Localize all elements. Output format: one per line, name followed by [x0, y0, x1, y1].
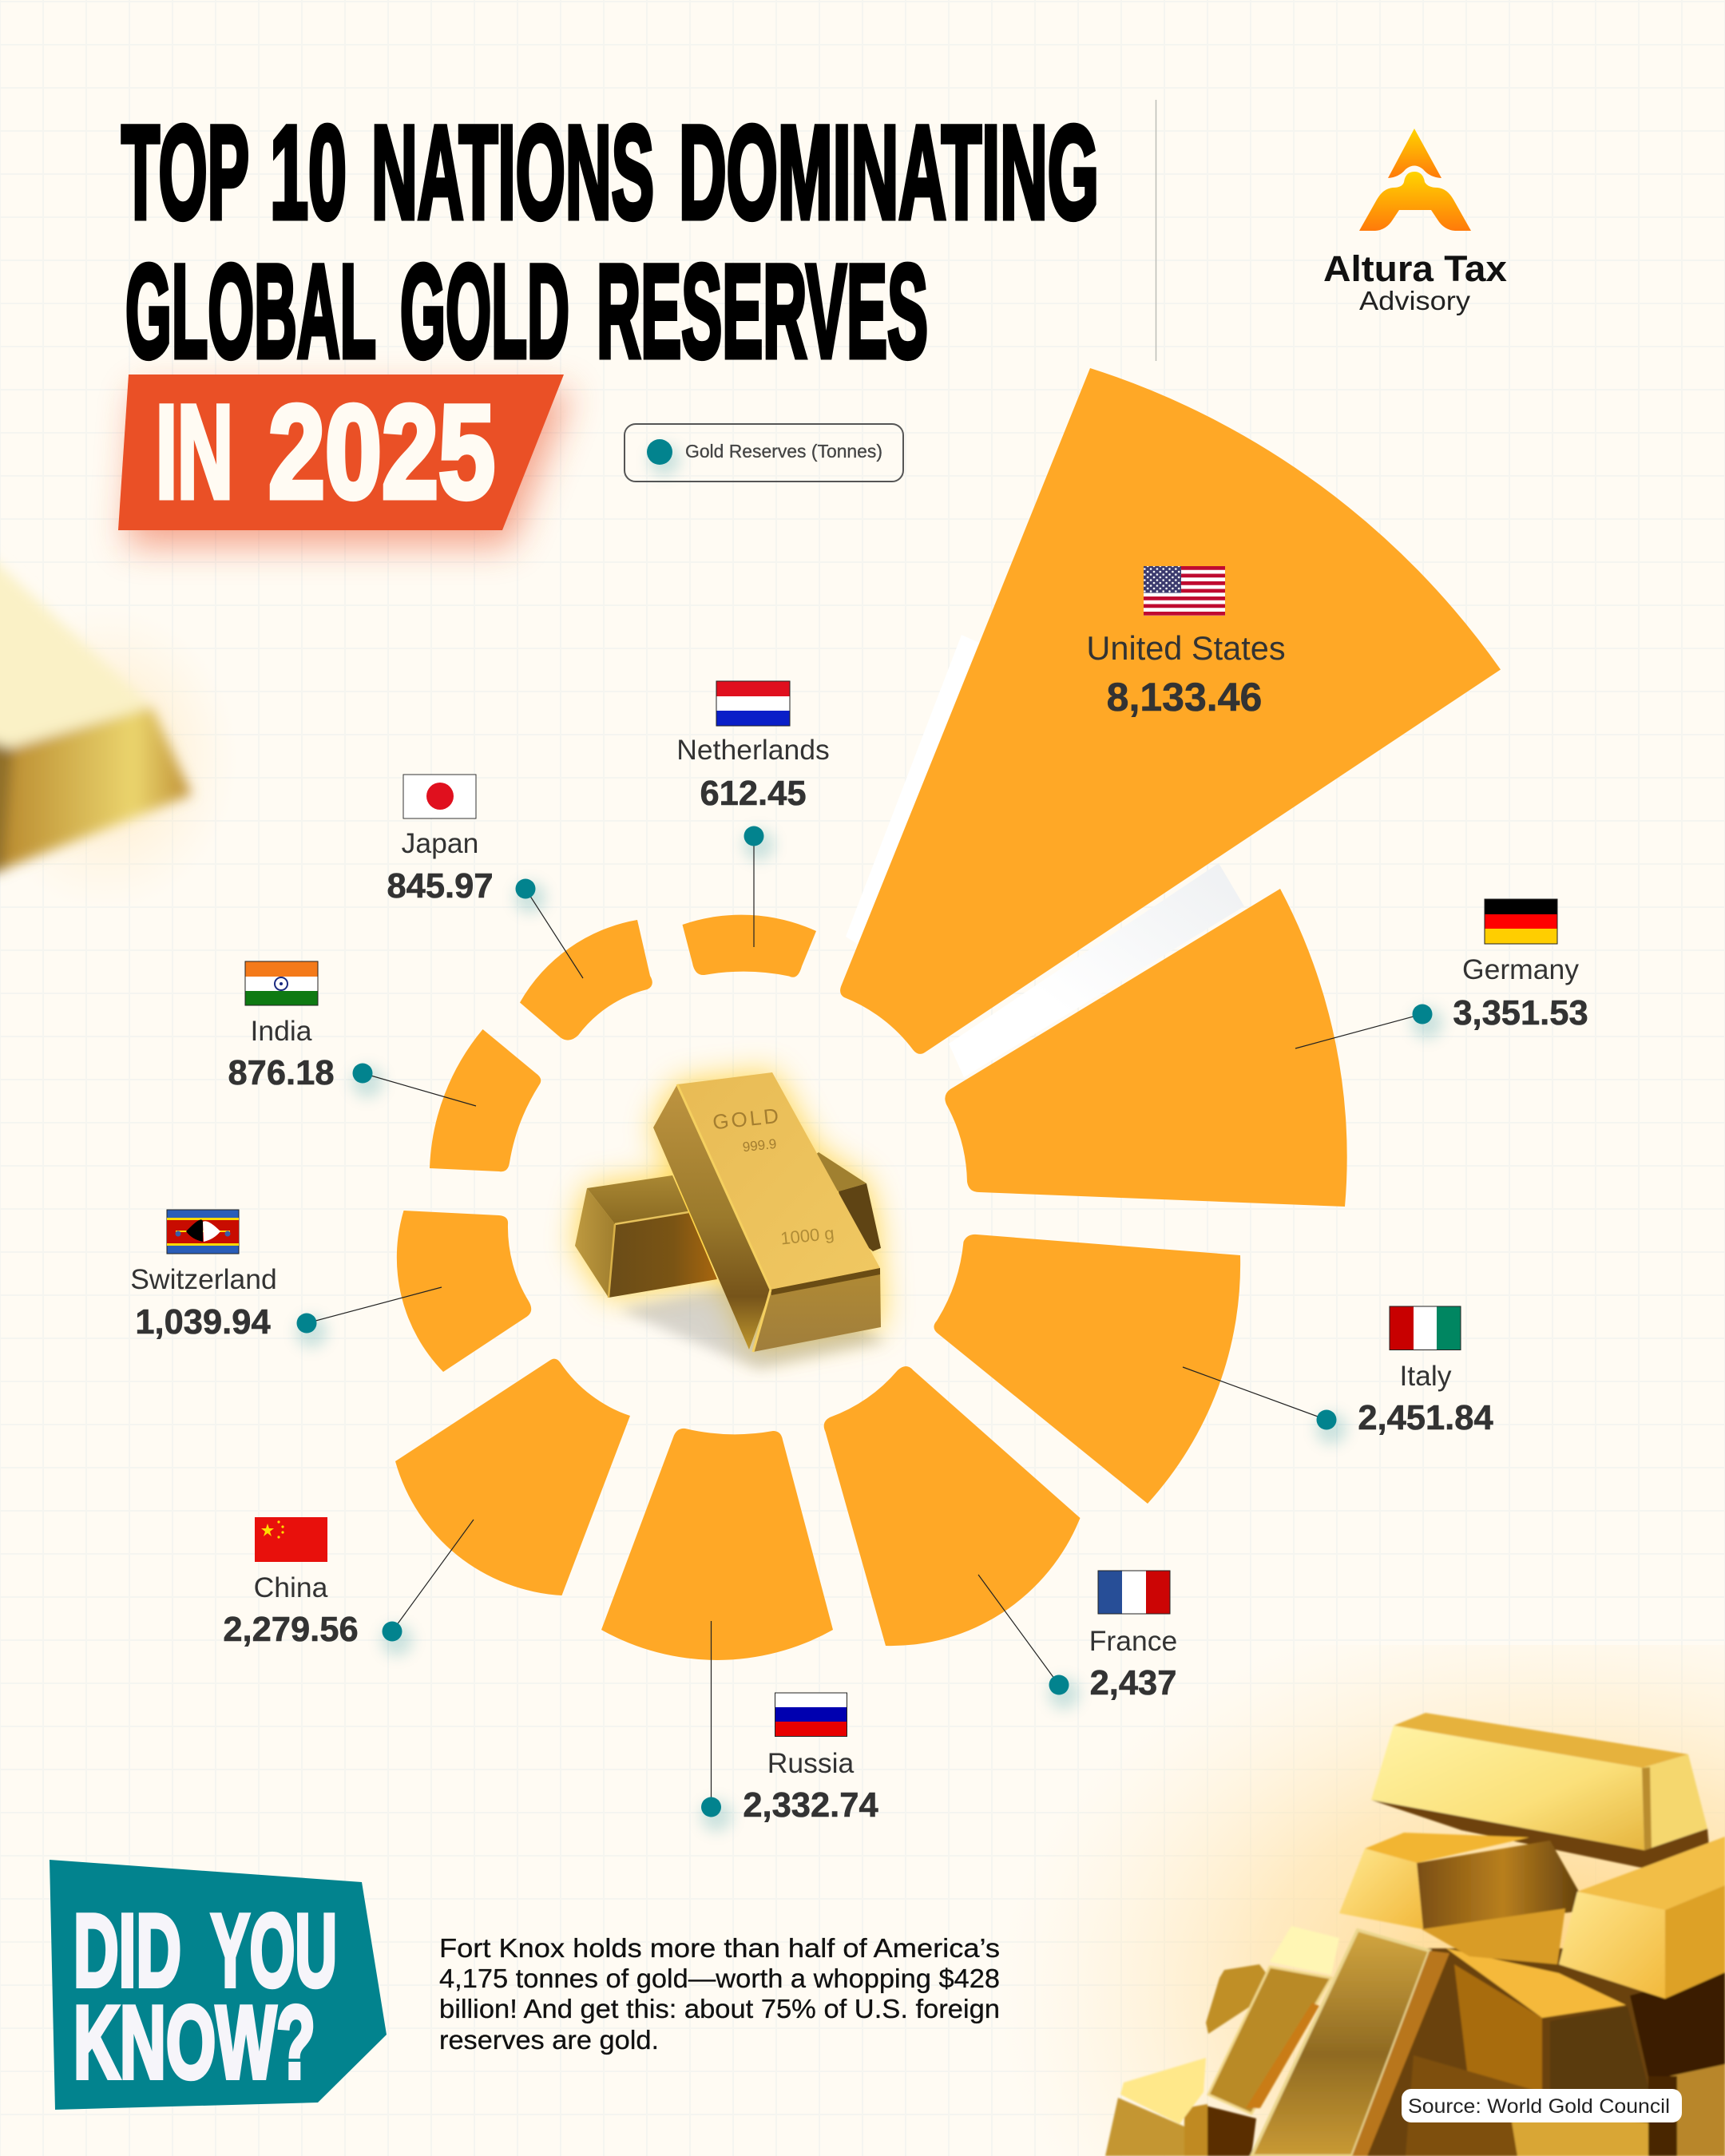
flag: Japan — [403, 775, 476, 818]
wedge: Germany — [945, 889, 1347, 1207]
year banner: 2025 — [268, 378, 495, 526]
label: Japan — [387, 775, 583, 978]
divider — [1155, 100, 1156, 361]
label: France: France — [1089, 1625, 1177, 1657]
text block: fact: 4,175 tonnes of gold—worth a whopping $428 — [439, 1964, 1000, 1993]
flag: Swaziland-style — [167, 1210, 239, 1254]
logo — [1323, 129, 1507, 315]
label: Germany: Germany — [1462, 953, 1579, 985]
text block: fact: reserves are gold. — [439, 2025, 659, 2055]
title: NATIONS — [371, 99, 654, 247]
flag: Germany — [1485, 899, 1557, 944]
callout: did you know — [50, 1860, 387, 2110]
front bar: GOLD — [712, 1104, 782, 1134]
label: Switzerland — [130, 1210, 442, 1348]
callout: did you know: DID — [73, 1893, 181, 2008]
title: GOLD — [400, 238, 569, 386]
wedge: China — [395, 1359, 630, 1595]
label: Italy: 2,451.84 — [1358, 1399, 1493, 1437]
logo: Altura Tax — [1323, 248, 1507, 289]
wedge highlight bands — [846, 635, 1244, 1077]
text: DOMINATING — [679, 99, 1099, 247]
wedge: Switzerland — [397, 1211, 531, 1372]
wedge: India — [430, 1029, 541, 1171]
wedge: France — [824, 1366, 1080, 1646]
label: Netherlands — [676, 681, 830, 947]
front bar — [653, 1072, 881, 1352]
title: GLOBAL — [125, 238, 376, 386]
label: United States: United States — [1086, 629, 1286, 667]
flag: Russia — [775, 1693, 847, 1736]
wedge: United States — [840, 368, 1501, 1054]
label: Japan: Japan — [402, 827, 478, 859]
label: India — [228, 961, 476, 1106]
year banner: IN — [156, 378, 233, 526]
label: India: 876.18 — [228, 1054, 335, 1092]
label: Switzerland: Switzerland — [130, 1263, 277, 1295]
rear bar — [575, 1152, 881, 1298]
label: Germany — [1295, 899, 1588, 1048]
label: Germany: 3,351.53 — [1453, 994, 1588, 1032]
title — [121, 99, 1099, 386]
source note — [1402, 2089, 1682, 2122]
label: Russia: Russia — [767, 1747, 855, 1779]
flag: France — [1098, 1571, 1170, 1614]
wedge: Italy — [934, 1235, 1240, 1504]
wedge: Russia — [601, 1429, 833, 1660]
flag: India — [245, 961, 318, 1005]
label: France: 2,437 — [1090, 1664, 1176, 1702]
flag: Netherlands — [716, 681, 790, 726]
flag: Italy — [1390, 1306, 1461, 1349]
wedge: Netherlands — [682, 915, 816, 977]
label: China — [223, 1517, 474, 1656]
label: India: India — [251, 1015, 312, 1047]
title: 10 — [270, 99, 347, 247]
text block: fact: Fort Knox holds more than half of America’s — [439, 1933, 1000, 1963]
text block: fact: billion! And get this: about 75% of U.S. foreign — [439, 1994, 1000, 2023]
decorative image: blurred gold bar left — [0, 551, 264, 910]
label: Japan: 845.97 — [387, 867, 494, 906]
label: United States — [1086, 566, 1286, 719]
label: Switzerland: 1,039.94 — [135, 1303, 271, 1342]
wedge: Japan — [520, 920, 652, 1040]
title: TOP — [121, 99, 249, 247]
flag: China — [255, 1517, 327, 1562]
label: United States: 8,133.46 — [1107, 675, 1262, 719]
legend: Gold Reserves (Tonnes) — [685, 441, 882, 462]
title: RESERVES — [597, 238, 928, 386]
decorative image: gold bar stack bottom right — [998, 1645, 1725, 2156]
label: Italy: Italy — [1399, 1360, 1452, 1392]
callout: did you know: KNOW? — [73, 1985, 315, 2100]
front bar: 1000 g — [779, 1223, 835, 1248]
label: France — [978, 1571, 1177, 1710]
label: Italy — [1183, 1306, 1493, 1445]
label: Netherlands: 612.45 — [700, 775, 807, 813]
logo: Advisory — [1359, 286, 1471, 315]
radial bar chart — [395, 368, 1501, 1660]
text block: fact — [439, 1933, 1000, 2055]
label: Russia: 2,332.74 — [743, 1786, 878, 1825]
center image: gold bars — [575, 1072, 886, 1369]
label: China: China — [254, 1571, 328, 1603]
legend — [625, 424, 903, 482]
year banner — [118, 375, 572, 546]
label: Netherlands: Netherlands — [676, 734, 830, 766]
label: China: 2,279.56 — [223, 1611, 359, 1649]
callout: did you know: YOU — [211, 1893, 337, 2008]
flag: United States — [1144, 566, 1225, 616]
front bar: 999.9 — [742, 1136, 777, 1155]
source note: Source: World Gold Council — [1408, 2095, 1670, 2118]
label: Russia — [700, 1621, 878, 1832]
